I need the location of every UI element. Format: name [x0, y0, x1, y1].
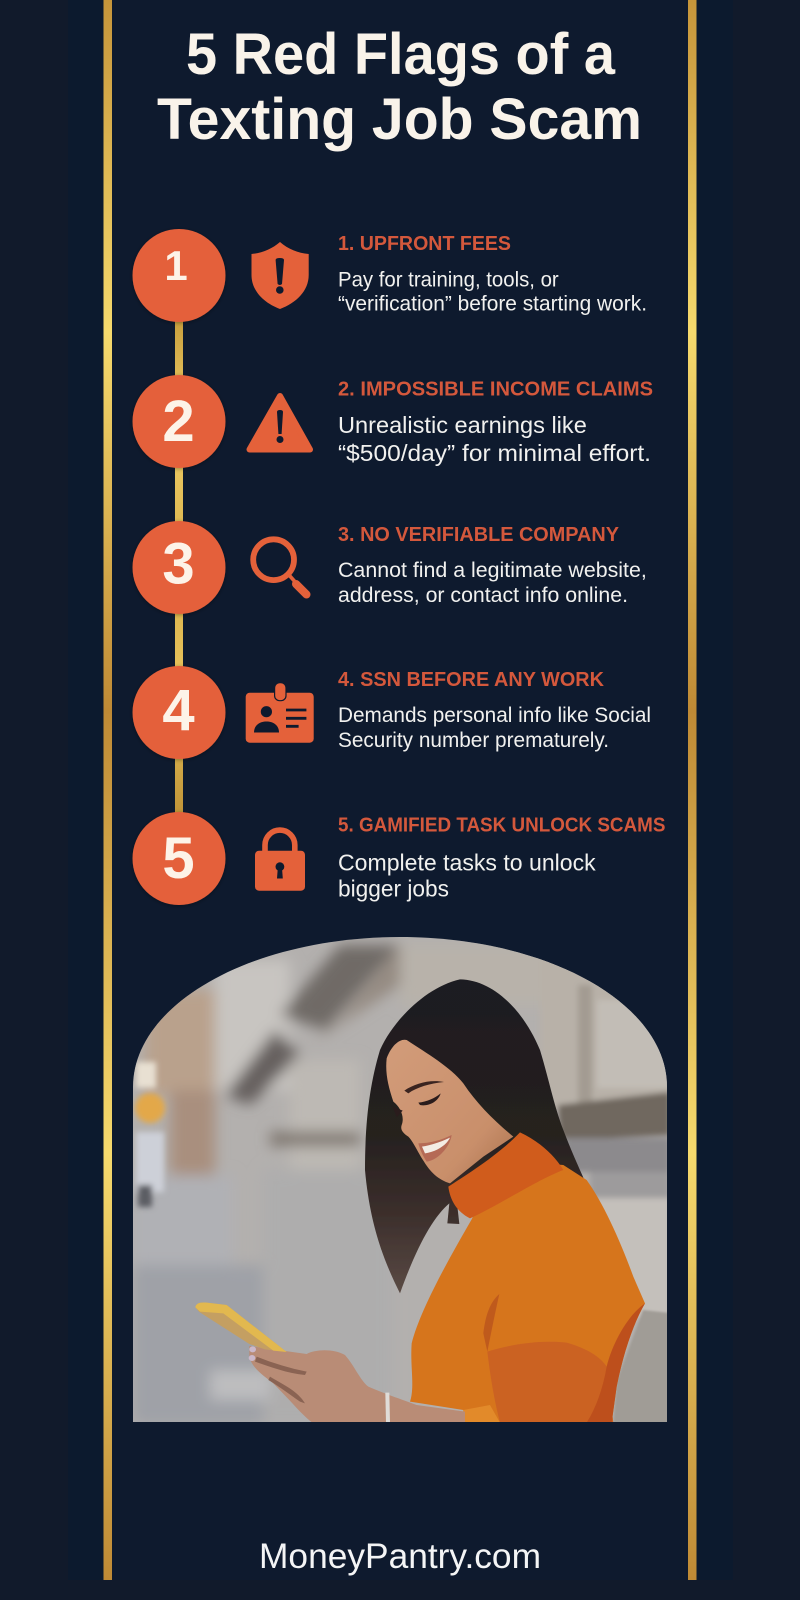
photo: woman in orange sweater smiling at phone, arch-shaped [130, 935, 670, 1425]
hand and forearm [249, 1346, 465, 1423]
number badge 4 [132, 666, 226, 759]
step 3 [132, 521, 647, 614]
text: upfront fees [338, 232, 647, 316]
icon: padlock [255, 830, 305, 891]
icon: id badge [246, 683, 314, 743]
text: upfront fees: “verification” before starting work. [338, 292, 647, 316]
number badge 5: 5 [162, 826, 195, 891]
number badge 1 [132, 229, 226, 322]
timeline connector [175, 320, 183, 814]
text: impossible income claims: Unrealistic earnings like [338, 412, 587, 438]
text: no verifiable company: 3. NO VERIFIABLE COMPANY [338, 523, 619, 546]
phone [195, 1303, 287, 1352]
icon: warning triangle [250, 396, 310, 450]
number badge 2: 2 [162, 389, 195, 454]
title [157, 22, 642, 152]
blurred street wall backdrop [133, 945, 670, 1425]
text: gamified task unlock scams [338, 814, 665, 902]
number badge 3: 3 [162, 532, 195, 596]
hair [365, 979, 592, 1293]
text: impossible income claims: 2. IMPOSSIBLE INCOME CLAIMS [338, 378, 653, 401]
text: impossible income claims: “$500/day” for minimal effort. [338, 440, 651, 466]
left gold border bar [104, 0, 112, 1580]
icon: magnifier [253, 539, 306, 594]
title: Texting Job Scam [157, 87, 642, 152]
text: gamified task unlock scams: Complete tasks to unlock [338, 850, 596, 876]
number badge 1: 1 [164, 242, 188, 289]
title: 5 Red Flags of a [186, 22, 616, 87]
right gold border bar [688, 0, 696, 1580]
text: ssn before any work: Demands personal info like Social [338, 703, 651, 727]
text: upfront fees: 1. UPFRONT FEES [338, 232, 511, 255]
face and neck [386, 1040, 513, 1183]
orange sweater body [410, 1160, 645, 1423]
number badge 3 [132, 521, 226, 614]
stone at bottom right [613, 1310, 670, 1425]
text: gamified task unlock scams: bigger jobs [338, 876, 449, 902]
text: gamified task unlock scams: 5. GAMIFIED TASK UNLOCK SCAMS [338, 814, 665, 837]
text: ssn before any work: 4. SSN BEFORE ANY WORK [338, 668, 604, 691]
text: upfront fees: Pay for training, tools, or [338, 268, 559, 292]
text: ssn before any work [338, 668, 651, 752]
number badge 4: 4 [162, 678, 195, 743]
step 4 [132, 666, 651, 759]
step 1 [132, 229, 647, 322]
text: no verifiable company: address, or contact info online. [338, 583, 628, 607]
icon: shield [252, 242, 309, 309]
lights on left edge [135, 1062, 165, 1207]
step 2 [132, 375, 653, 468]
text: ssn before any work: Security number prematurely. [338, 728, 609, 752]
step 5 [132, 812, 665, 905]
right wall details [540, 950, 670, 1318]
text: no verifiable company [338, 523, 647, 607]
footer site name: MoneyPantry.com [259, 1537, 541, 1576]
turtleneck collar [448, 1132, 563, 1218]
number badge 5 [132, 812, 226, 905]
text: no verifiable company: Cannot find a legitimate website, [338, 558, 647, 582]
number badge 2 [132, 375, 226, 468]
text: impossible income claims [338, 378, 653, 466]
